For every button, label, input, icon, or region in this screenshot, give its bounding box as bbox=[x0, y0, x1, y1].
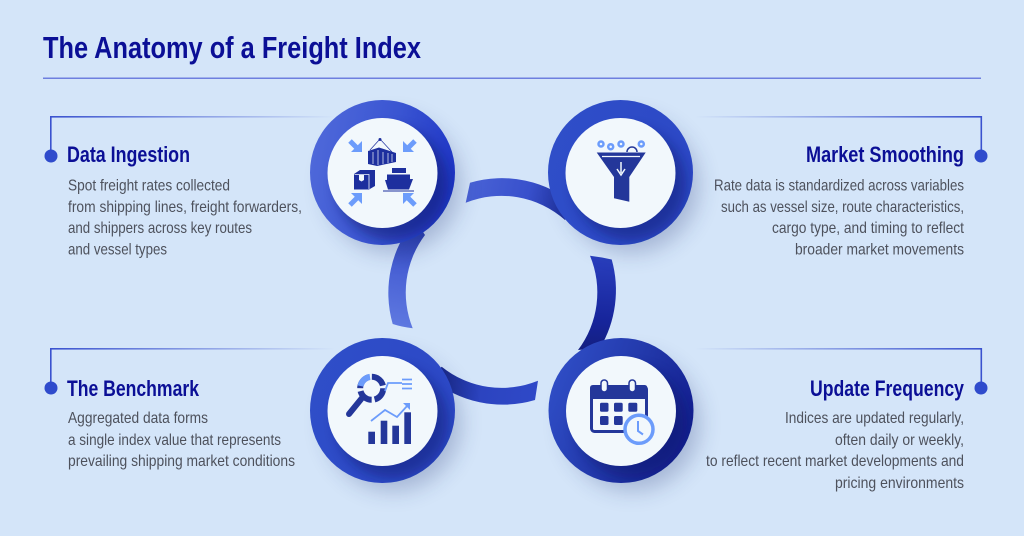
ring segment: left bbox=[388, 220, 425, 328]
connector line bbox=[44, 116, 335, 162]
circle badge bbox=[310, 100, 461, 253]
body text: Indices are updated regularly, bbox=[785, 410, 964, 427]
connector line bbox=[695, 116, 988, 162]
ring segment: right bbox=[578, 256, 616, 350]
panel: data ingestion bbox=[44, 100, 461, 258]
body text bbox=[714, 178, 964, 258]
connector line bbox=[695, 348, 988, 394]
body text: Aggregated data forms bbox=[68, 410, 208, 427]
ring segment: top bbox=[466, 178, 575, 220]
body text: broader market movements bbox=[795, 242, 964, 258]
body text: such as vessel size, route characteristics, bbox=[721, 199, 964, 216]
body text: Rate data is standardized across variables bbox=[714, 178, 964, 194]
icon: funnel bbox=[597, 142, 646, 202]
body text bbox=[68, 410, 295, 470]
panel: update frequency bbox=[548, 338, 988, 492]
body text: often daily or weekly, bbox=[835, 432, 964, 449]
body text: pricing environments bbox=[835, 475, 964, 492]
body text: a single index value that represents bbox=[68, 432, 281, 449]
body text: and vessel types bbox=[68, 242, 167, 258]
panel: market smoothing bbox=[548, 100, 988, 258]
title: The Anatomy of a Freight Index bbox=[43, 31, 421, 65]
icon: magnifier and chart bbox=[349, 377, 412, 444]
circle badge bbox=[310, 338, 461, 491]
body text bbox=[706, 410, 964, 492]
body text: from shipping lines, freight forwarders, bbox=[68, 199, 302, 216]
heading: Data Ingestion bbox=[67, 142, 190, 167]
heading: Update Frequency bbox=[810, 376, 965, 401]
icon: calendar and clock bbox=[590, 380, 653, 443]
circle badge bbox=[548, 338, 700, 491]
circle badge bbox=[548, 100, 699, 253]
heading: Market Smoothing bbox=[806, 142, 964, 167]
body text: and shippers across key routes bbox=[68, 220, 252, 237]
body text bbox=[68, 178, 302, 258]
body text: Spot freight rates collected bbox=[68, 178, 230, 194]
heading: The Benchmark bbox=[67, 376, 200, 401]
connector line bbox=[44, 348, 335, 394]
panel: the benchmark bbox=[44, 338, 461, 491]
icon: cargo convergence bbox=[350, 138, 415, 205]
ring segment: bottom bbox=[430, 367, 538, 405]
body text: prevailing shipping market conditions bbox=[68, 453, 295, 470]
body text: to reflect recent market developments and bbox=[706, 453, 964, 470]
body text: cargo type, and timing to reflect bbox=[772, 220, 964, 237]
